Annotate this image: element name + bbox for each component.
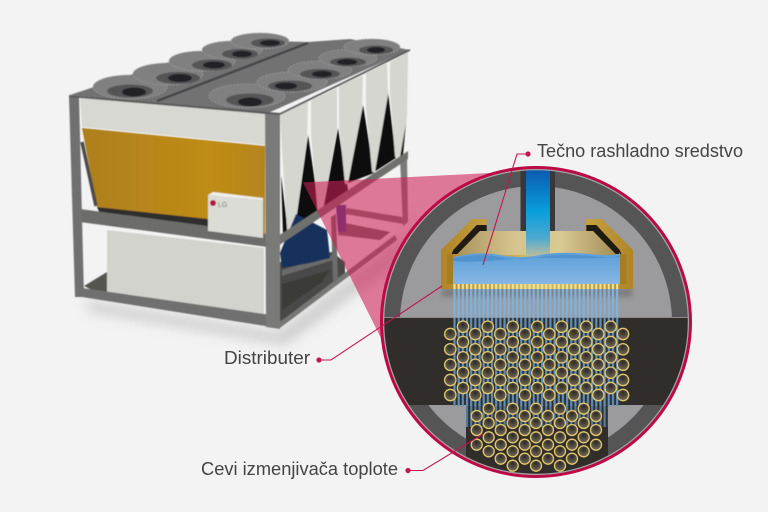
leader: liquid refrigerant [483,151,531,265]
gold coil face [82,128,265,238]
front lower panel [107,230,264,316]
control box with LG logo [208,192,263,238]
compressor [280,214,330,268]
left bracket [82,142,96,206]
base floor and right side frame [280,155,408,328]
chiller unit illustration [69,33,415,345]
label: liquid refrigerant: Tečno rashladno sredstvo [537,141,743,161]
middle rail [278,151,408,246]
lower tube bundle [471,403,602,471]
label: heat exchanger tubes: Cevi izmenjivača toplote [201,459,398,479]
left floor [84,272,107,292]
middle front bar [80,209,268,247]
liquid streams [453,289,620,427]
crimson ring [382,168,690,476]
distributor tray [441,168,633,289]
lower dark centre [466,405,608,474]
V-shaped coil panels [280,52,408,230]
control box with LG logo: LG [218,202,227,209]
feed pipe casing [520,165,555,231]
liquid in pipe [526,168,550,256]
leader: heat exchanger tubes [405,434,483,473]
distributor shadow [442,288,632,297]
leader: distributor [316,286,442,363]
ground shadow [84,200,415,345]
left post [69,96,84,297]
magnified cross-section [370,165,702,485]
bottom front bar [82,288,278,328]
inner grey chamber [400,186,672,458]
top front edge [69,49,410,115]
disc content [383,169,689,475]
upper tube bundle [445,321,629,401]
band highlight [370,317,702,318]
front upper panel [80,97,265,145]
black gaps between coils [281,92,407,234]
pink magnification wedge [303,172,500,392]
outer dark ring [382,168,690,476]
dark tube band [370,317,702,405]
label: distributor: Distributer [224,348,310,368]
machinery strip [97,207,208,229]
grey inner rim [384,170,688,474]
top deck with fans [70,33,410,113]
centre post [265,113,280,329]
